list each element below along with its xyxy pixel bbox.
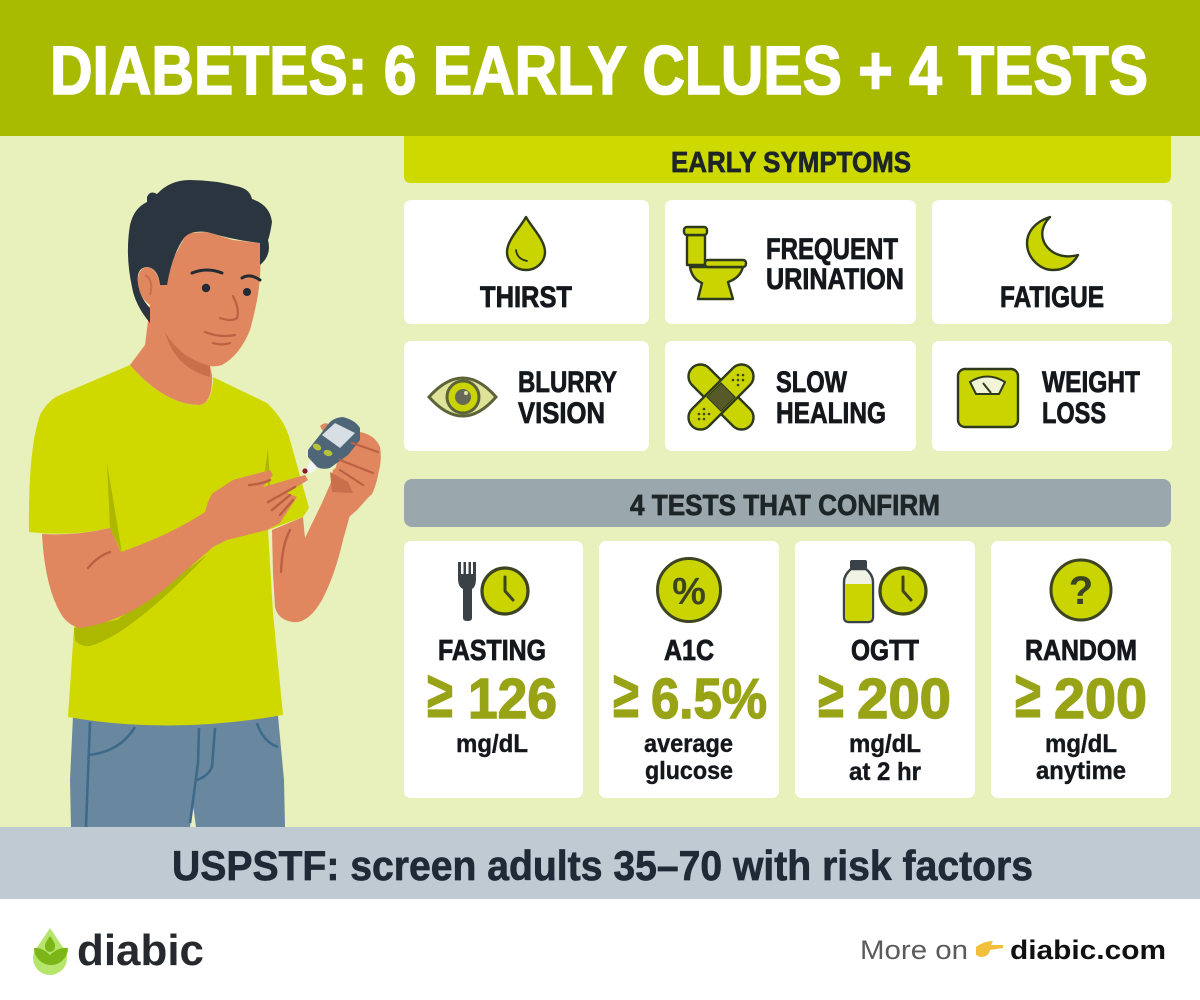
symptom card: slow healing [665, 341, 916, 451]
test card: random: 200 [1054, 667, 1147, 731]
test card: random [991, 541, 1171, 798]
icon: crescent moon [1027, 217, 1078, 270]
ear [138, 267, 160, 306]
neck and face [130, 232, 261, 405]
header banner [0, 0, 1200, 136]
icon: water drop [507, 217, 545, 270]
symptom card: slow healing: SLOW [776, 366, 848, 399]
section header: early symptoms [404, 136, 1171, 183]
test card: random: RANDOM [1025, 635, 1137, 667]
symptom card: frequent urination: FREQUENT [766, 233, 898, 266]
trousers [70, 716, 285, 827]
section header: early symptoms: EARLY SYMPTOMS [671, 147, 911, 179]
hand behind meter [320, 423, 381, 518]
symptom card: slow healing: HEALING [776, 397, 886, 430]
test card: random: anytime [1036, 757, 1126, 785]
test card: fasting: FASTING [438, 635, 546, 667]
logo: diabic: diabic [77, 926, 204, 975]
test card: A1C: glucose [645, 757, 733, 785]
icon: crossed bandages [684, 360, 758, 434]
test card: fasting: ≥ [427, 657, 453, 731]
test card: OGTT: mg/dL [849, 730, 921, 758]
icon: glucose bottle and clock [844, 560, 926, 622]
test card: OGTT [795, 541, 975, 798]
test card: A1C: average [644, 730, 733, 758]
website link: diabic.com [1010, 935, 1166, 965]
screening recommendation strip [0, 827, 1200, 899]
icon: question badge [1051, 560, 1111, 620]
symptom card: weight loss [932, 341, 1172, 451]
t-shirt [29, 365, 309, 726]
symptom card: frequent urination: URINATION [766, 263, 904, 296]
screening recommendation strip: USPSTF: screen adults 35–70 with risk factors [172, 842, 1033, 889]
fingers over meter [331, 443, 380, 515]
icon: toilet [684, 227, 746, 299]
test card: A1C: 6.5% [651, 667, 767, 731]
test card: A1C [599, 541, 779, 798]
test card: fasting [404, 541, 583, 798]
symptom card: weight loss: LOSS [1042, 397, 1106, 430]
shirt fold shadows [74, 448, 271, 646]
illustration: man checking blood glucose [29, 180, 381, 827]
glucose meter in hand [302, 417, 381, 518]
test card: OGTT: OGTT [851, 635, 919, 667]
test card: OGTT: ≥ [818, 657, 844, 731]
symptom card: weight loss: WEIGHT [1042, 366, 1140, 399]
icon: bathroom scale [958, 369, 1018, 427]
icon: percent badge: % [672, 571, 706, 613]
test card: random: mg/dL [1045, 730, 1117, 758]
section header: four tests: 4 TESTS THAT CONFIRM [630, 490, 940, 522]
section header: four tests [404, 479, 1171, 527]
test card: OGTT: at 2 hr [849, 758, 921, 786]
hair [128, 180, 272, 323]
symptom card: blurry vision: VISION [518, 397, 605, 430]
test card: random: ≥ [1015, 657, 1041, 731]
icon: question badge: ? [1069, 569, 1093, 613]
icon: eye [429, 378, 496, 416]
symptom card: blurry vision: BLURRY [518, 366, 617, 399]
website link: More on [860, 935, 968, 965]
test card: A1C: A1C [664, 635, 714, 667]
icon: fork and clock [458, 562, 528, 621]
viewer-right arm [272, 480, 377, 622]
website link [860, 935, 1166, 965]
icon: pointing hand [976, 941, 1003, 957]
symptom card: thirst: THIRST [480, 281, 572, 314]
symptom card: thirst [404, 200, 649, 324]
symptom card: fatigue: FATIGUE [1000, 281, 1104, 314]
test card: A1C: ≥ [613, 657, 639, 731]
symptom card: fatigue [932, 200, 1172, 324]
test card: fasting: 126 [468, 667, 557, 731]
meter body [308, 417, 360, 469]
test strip and blood drop [306, 461, 319, 474]
symptom card: frequent urination [665, 200, 916, 324]
icon: percent badge [658, 558, 720, 622]
viewer-left arm and pointing hand [42, 470, 308, 628]
footer [0, 899, 1200, 1000]
symptom card: blurry vision [404, 341, 649, 451]
test card: fasting: mg/dL [456, 730, 528, 758]
test card: OGTT: 200 [857, 667, 951, 731]
